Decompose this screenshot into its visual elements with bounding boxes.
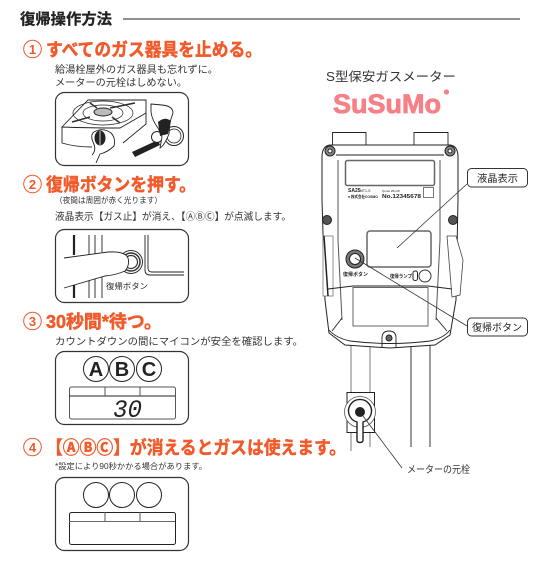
step 4 heading: 4 xyxy=(29,440,37,455)
icon: hand on knob xyxy=(92,130,115,163)
panel: stop appliances illustration xyxy=(56,92,188,166)
callout: reset button xyxy=(355,258,528,336)
meter name: S型保安ガスメーター xyxy=(326,70,456,84)
reset lamp: 復帰ランプ xyxy=(390,273,412,280)
panel: press reset button illustration xyxy=(56,230,188,302)
empty indicators xyxy=(84,482,162,508)
icon: finger xyxy=(64,252,129,288)
gas meter xyxy=(322,132,463,348)
reset lamp xyxy=(390,270,431,282)
step 3 heading: 3 xyxy=(29,314,36,329)
step 2 note: （夜間は周囲が赤く光ります） xyxy=(55,195,162,205)
step 1 text xyxy=(55,63,218,89)
LCD window xyxy=(367,231,431,267)
reset button on meter xyxy=(343,250,368,278)
title: 復帰操作方法 xyxy=(20,10,112,28)
step 1 text: メーターの元栓はしめない。 xyxy=(55,76,187,89)
step 1 text: 給湯栓屋外のガス器具も忘れずに。 xyxy=(55,63,218,76)
icon: reset button xyxy=(120,250,142,274)
step 4 note: *設定により90秒かかる場合があります。 xyxy=(55,461,207,471)
panel: cleared display xyxy=(56,478,188,550)
step 2 heading: 2 xyxy=(29,177,36,192)
step 3 text: カウントダウンの間にマイコンが安全を確認します。 xyxy=(55,335,303,348)
icon: main valve xyxy=(344,392,376,442)
icon: gas stove xyxy=(62,100,146,147)
meter plate text: SA25 xyxy=(348,188,361,194)
panel: countdown display xyxy=(56,352,188,425)
gas pipes xyxy=(351,345,430,451)
ABC indicators: B xyxy=(115,359,129,381)
icon: hand on valve xyxy=(132,104,184,157)
empty LCD display xyxy=(69,512,176,544)
ABC indicators: A xyxy=(89,359,103,381)
step 3 heading: 30秒間*待つ。 xyxy=(46,312,162,332)
step 2 heading: 復帰ボタンを押す。 xyxy=(46,175,196,195)
upper window xyxy=(346,160,434,186)
meter plate text: No.12345678 xyxy=(382,194,421,200)
LCD display: 30 xyxy=(113,396,142,425)
side grips xyxy=(323,236,463,297)
button label: 復帰ボタン xyxy=(106,281,148,291)
reset button on meter: 復帰ボタン xyxy=(343,271,368,278)
step 4 heading: 【ⒶⒷⒸ】が消えるとガスは使えます。 xyxy=(46,437,346,458)
logo: SuSuMo: SuSuMo xyxy=(333,89,441,119)
callout: reset button: 復帰ボタン xyxy=(472,321,522,334)
ABC indicators xyxy=(84,356,162,382)
callout: LCD display xyxy=(397,168,528,248)
lower panel xyxy=(353,288,428,326)
ABC indicators: C xyxy=(142,359,156,381)
callout: main valve xyxy=(363,416,470,476)
step 1 heading: 1 xyxy=(29,42,36,57)
meter plate text: Qmax 25m³/h xyxy=(382,189,401,193)
meter plate text: ● 株式会社COSMO xyxy=(348,193,378,199)
callout: main valve: メーターの元栓 xyxy=(407,463,470,476)
step 2 text: 液晶表示【ガス止】が消え、【ⒶⒷⒸ】が点滅します。 xyxy=(55,210,291,223)
meter plate text: MT1-S xyxy=(360,189,371,193)
step 1 heading: すべてのガス器具を止める。 xyxy=(46,40,262,60)
corner screws xyxy=(322,146,458,347)
meter plate text xyxy=(348,188,434,200)
callout: LCD display: 液晶表示 xyxy=(477,173,518,185)
